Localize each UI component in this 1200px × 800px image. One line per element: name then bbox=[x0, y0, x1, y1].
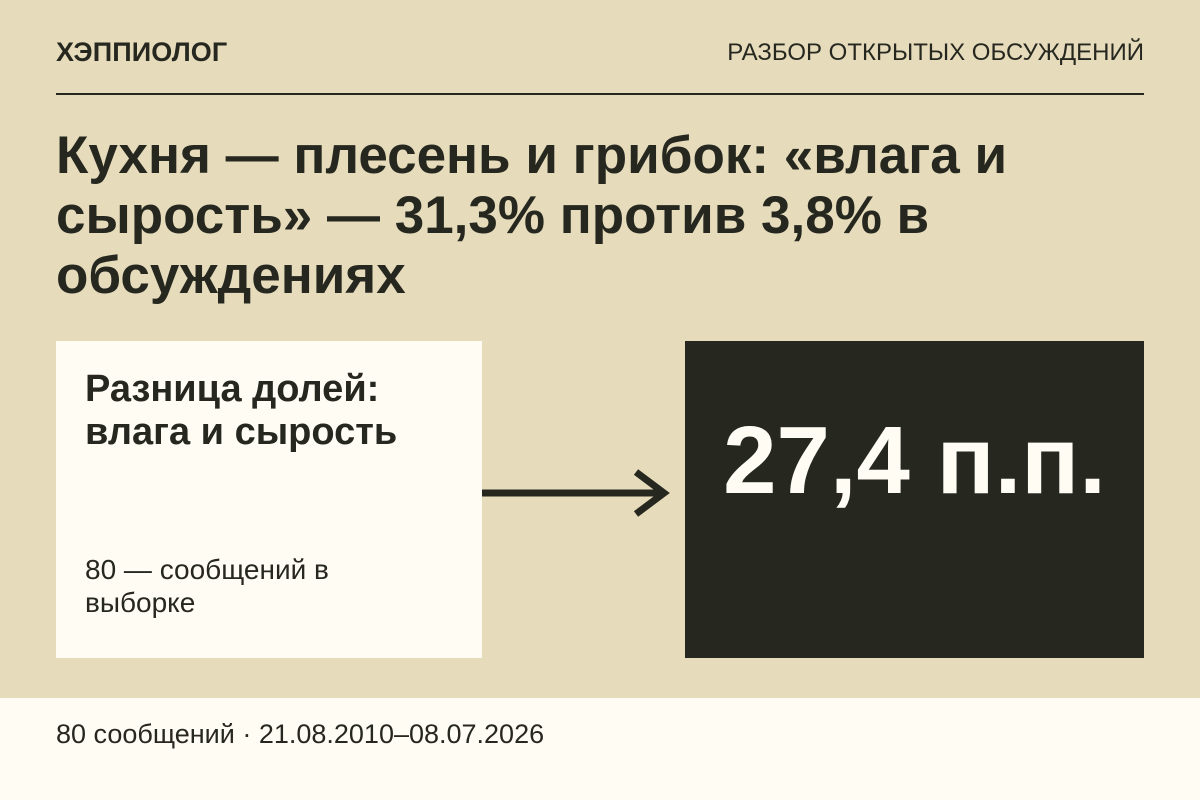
value: 27,4 п.п. bbox=[723, 407, 1106, 514]
panel: key value bbox=[685, 341, 1144, 658]
title: обсуждениях bbox=[56, 246, 406, 305]
title bbox=[56, 126, 1007, 305]
header caption: РАЗБОР ОТКРЫТЫХ ОБСУЖДЕНИЙ bbox=[727, 39, 1144, 66]
brand name: ХЭППИОЛОГ bbox=[56, 37, 227, 67]
footer bbox=[0, 698, 1200, 800]
footer text: 80 сообщений · 21.08.2010–08.07.2026 bbox=[56, 719, 544, 749]
sample note: выборке bbox=[85, 587, 195, 618]
panel heading bbox=[85, 368, 397, 452]
title: Кухня — плесень и грибок: «влага и bbox=[56, 126, 1007, 185]
panel heading: влага и сырость bbox=[85, 410, 397, 452]
sample note: 80 — сообщений в bbox=[85, 554, 329, 585]
title: сырость» — 31,3% против 3,8% в bbox=[56, 186, 929, 245]
sample note bbox=[85, 554, 329, 618]
arrow bbox=[482, 469, 670, 517]
panel: metric description bbox=[56, 341, 482, 658]
panel heading: Разница долей: bbox=[85, 368, 379, 410]
